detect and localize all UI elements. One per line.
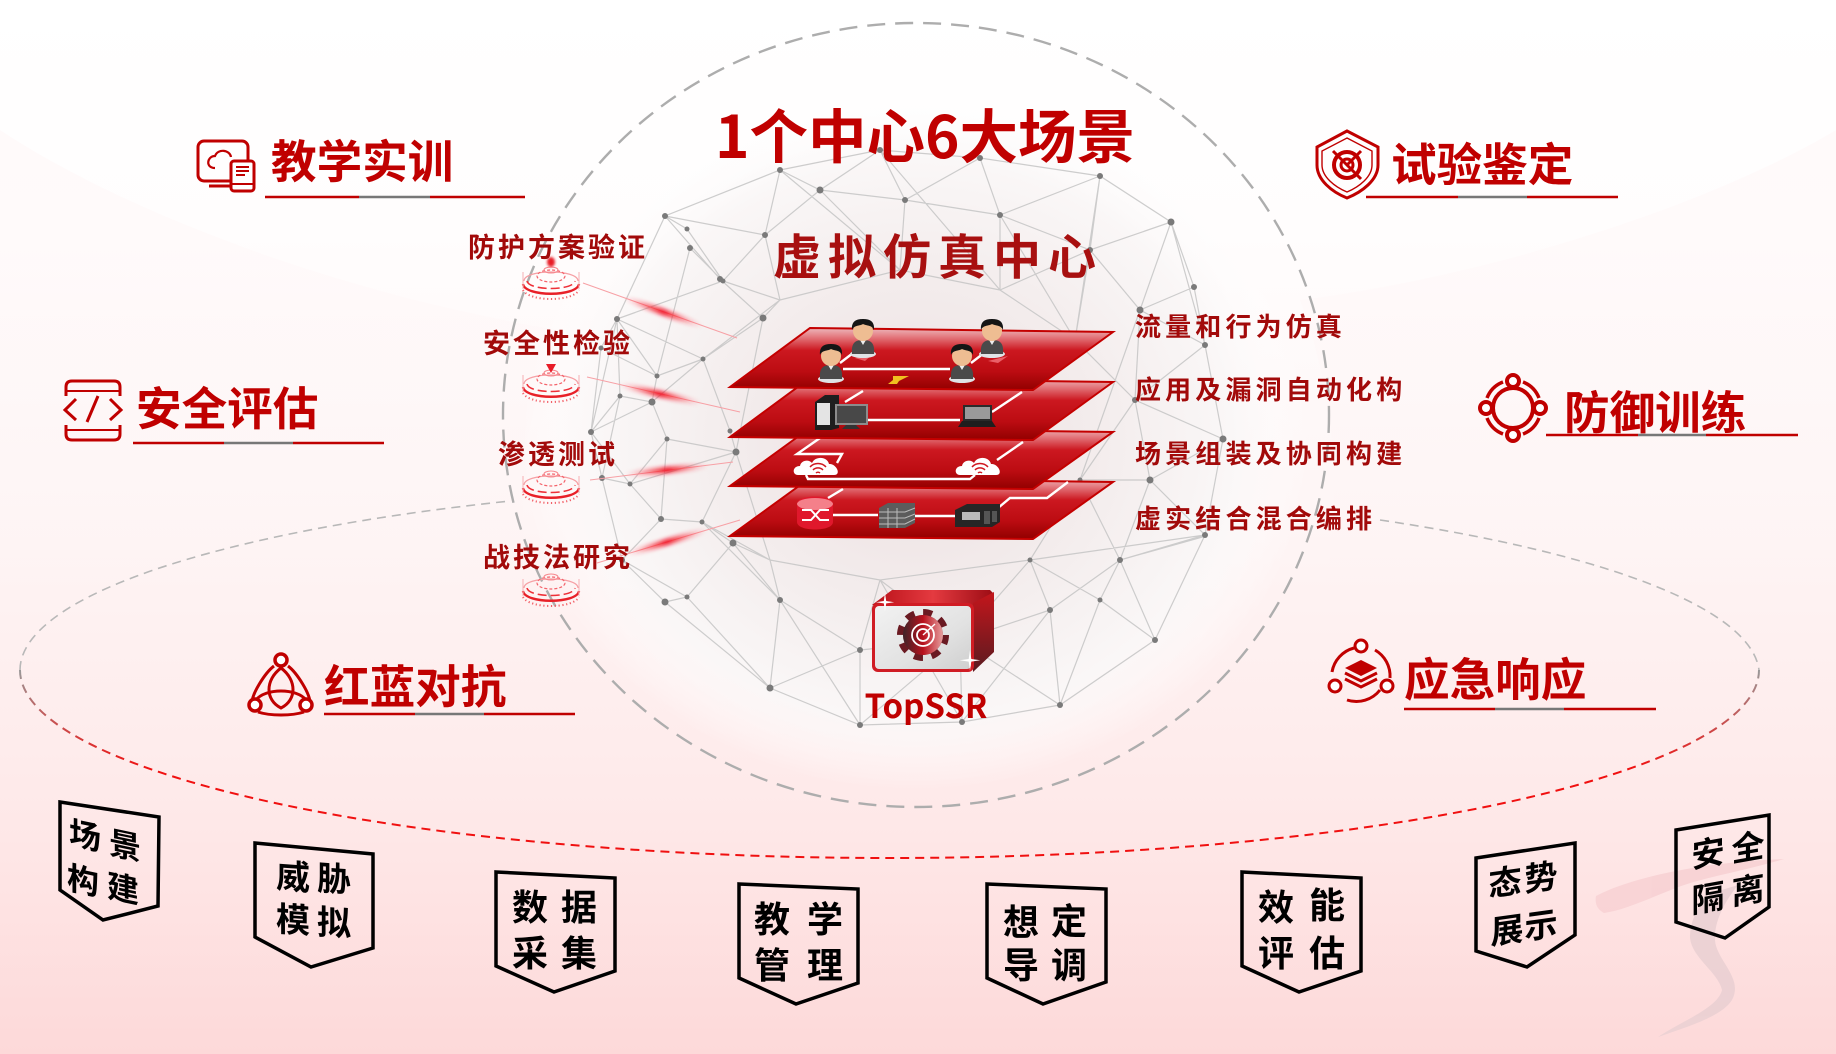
main title: 1个中心6大场景: [715, 90, 1135, 175]
TopSSR box icon: [872, 590, 994, 672]
right label: scene assembly: 场景组装及协同构建: [1135, 434, 1406, 471]
brush stroke decoration: [1596, 859, 1784, 1037]
heading: test appraisal: [1317, 129, 1618, 198]
heading: defense training: 防御训练: [1564, 377, 1746, 443]
layer 4 with network devices: [730, 478, 1113, 539]
layered platform stack: [730, 319, 1113, 539]
radar icon 2: [523, 364, 579, 402]
radar icon 3: [523, 471, 579, 503]
right label: virtual real orchestration: 虚实结合混合编排: [1135, 499, 1376, 536]
left label: protection verification: 防护方案验证: [468, 226, 648, 265]
heading: teaching training: [198, 126, 525, 197]
heading: safety assessment: 安全评估: [136, 373, 318, 439]
banner: scenario directing: [987, 884, 1106, 1004]
banner: security isolation: 安: [1691, 823, 1725, 878]
icon: circular network: [1480, 375, 1546, 441]
beams linking left labels to layers: [583, 283, 740, 563]
sphere glow: [520, 90, 1310, 790]
large dashed circle: [503, 23, 1329, 807]
banner: teaching management: 教: [754, 891, 790, 943]
banner: effectiveness evaluation: 能: [1309, 877, 1345, 929]
banner: security isolation: 隔: [1691, 868, 1725, 923]
banner: threat simulation: 模: [276, 892, 310, 943]
banner: scenario directing: 调: [1051, 937, 1087, 989]
banner: data collection: [496, 872, 615, 992]
icon: shield with target: [1317, 131, 1378, 198]
banner: scenario directing: 定: [1051, 893, 1087, 945]
network sphere: [588, 147, 1226, 728]
banner: teaching management: 学: [807, 891, 843, 943]
banner: situation display: 示: [1525, 897, 1557, 949]
banner: scene building: 构: [67, 852, 99, 905]
banner: scenario directing: 导: [1003, 937, 1039, 989]
layer 1 with operators: [730, 319, 1113, 390]
banner: situation display: 势: [1525, 849, 1557, 901]
layer 3 with wireless clouds: [730, 428, 1113, 489]
right label: vulnerability construction: 应用及漏洞自动化构: [1135, 370, 1406, 407]
banner: threat simulation: [255, 843, 373, 967]
banner: situation display: [1476, 843, 1575, 967]
right label: traffic simulation: 流量和行为仿真: [1135, 307, 1346, 344]
banner: data collection: 采: [512, 925, 548, 977]
icon: layers in ring: [1329, 640, 1393, 702]
dashed ellipse: upper right part: [1380, 520, 1759, 670]
left label: penetration testing: 渗透测试: [498, 433, 618, 472]
heading: emergency response: [1329, 640, 1656, 710]
banner: threat simulation: 胁: [317, 851, 351, 902]
banner: data collection: 据: [561, 879, 597, 931]
heading: safety assessment: [65, 373, 384, 443]
banner: teaching management: 理: [807, 937, 843, 989]
dashed ellipse: lower half: [20, 670, 1759, 858]
heading: test appraisal: 试验鉴定: [1391, 129, 1573, 195]
banner: scene building: 场: [69, 807, 101, 860]
subtitle: virtual simulation center: 虚拟仿真中心: [773, 218, 1103, 288]
TopSSR label: TopSSR: [865, 680, 987, 728]
left label: tactics research: 战技法研究: [483, 536, 633, 575]
left label: security inspection: 安全性检验: [483, 322, 633, 361]
banner: effectiveness evaluation: 估: [1309, 925, 1345, 977]
banner: data collection: 数: [512, 879, 548, 931]
layer 2 with computers: [730, 378, 1113, 440]
radar icon 4: [523, 574, 579, 606]
banner: effectiveness evaluation: [1242, 872, 1361, 992]
heading: emergency response: 应急响应: [1404, 644, 1586, 710]
banner: scenario directing: 想: [1003, 894, 1039, 946]
banner: effectiveness evaluation: 评: [1258, 925, 1294, 977]
banner: threat simulation: 拟: [317, 895, 351, 946]
banner: scene building: [60, 802, 159, 920]
radar icon 1: [523, 257, 579, 299]
icon: cloud screen and tablet: [198, 141, 254, 191]
banner: situation display: 展: [1491, 902, 1523, 954]
banner: security isolation: 离: [1731, 860, 1765, 915]
icon: code window: [65, 381, 121, 440]
icon: triangular knot: [249, 654, 312, 715]
heading: red blue confrontation: 红蓝对抗: [324, 651, 506, 717]
banner: teaching management: 管: [754, 937, 790, 989]
banner: security isolation: [1676, 815, 1769, 938]
banner: scene building: 建: [107, 860, 139, 913]
banner: situation display: 态: [1489, 854, 1521, 906]
heading: defense training: [1480, 375, 1798, 443]
heading: red blue confrontation: [249, 651, 575, 717]
banner: data collection: 集: [561, 925, 597, 977]
heading: teaching training: 教学实训: [271, 126, 453, 192]
banner: security isolation: 全: [1731, 817, 1765, 872]
banner: threat simulation: 威: [276, 849, 310, 900]
banner: scene building: 景: [109, 817, 141, 870]
banner: teaching management: [739, 884, 858, 1004]
dashed ellipse: upper left part: [20, 501, 510, 670]
banner: effectiveness evaluation: 效: [1258, 879, 1294, 931]
